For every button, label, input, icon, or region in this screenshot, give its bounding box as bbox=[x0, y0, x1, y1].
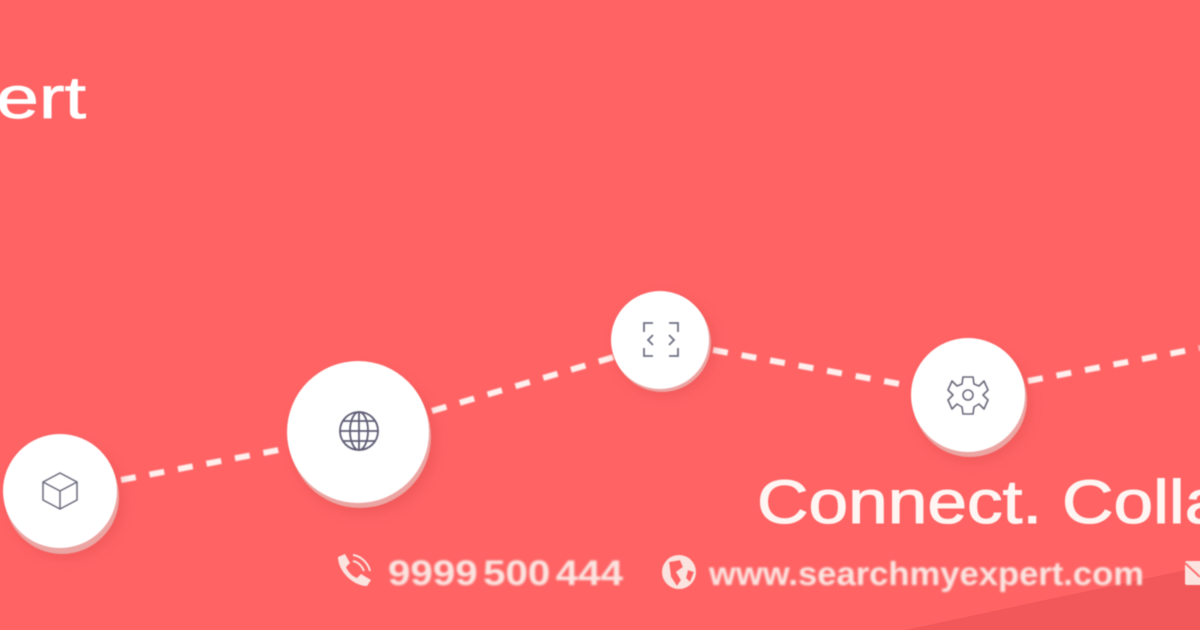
node: cube bbox=[3, 434, 123, 557]
website: www.searchmyexpert.com bbox=[708, 555, 1144, 592]
dashed connector: node 2 to node 3 bbox=[432, 357, 614, 411]
node: globe bbox=[287, 361, 435, 513]
node: gear bbox=[911, 338, 1030, 461]
dashed connector: node 3 to node 4 bbox=[713, 350, 900, 384]
icon: globe small bbox=[662, 555, 696, 589]
phone number: 9999 500 444 bbox=[388, 554, 624, 593]
dashed connector: node 1 to node 2 bbox=[121, 449, 284, 480]
node: code scan bbox=[611, 291, 714, 395]
dashed connector: node 4 to right edge bbox=[1028, 348, 1200, 381]
icon: code scan brackets bbox=[644, 323, 678, 356]
icon: envelope bbox=[1185, 561, 1200, 585]
contact row bbox=[338, 554, 1200, 593]
icon: globe bbox=[340, 412, 378, 450]
icon: cube bbox=[43, 473, 77, 509]
icon: gear bbox=[948, 377, 988, 414]
darker corner shape bbox=[905, 567, 1200, 630]
icon: phone bbox=[338, 554, 371, 586]
tagline: Connect. Collab bbox=[757, 468, 1200, 536]
